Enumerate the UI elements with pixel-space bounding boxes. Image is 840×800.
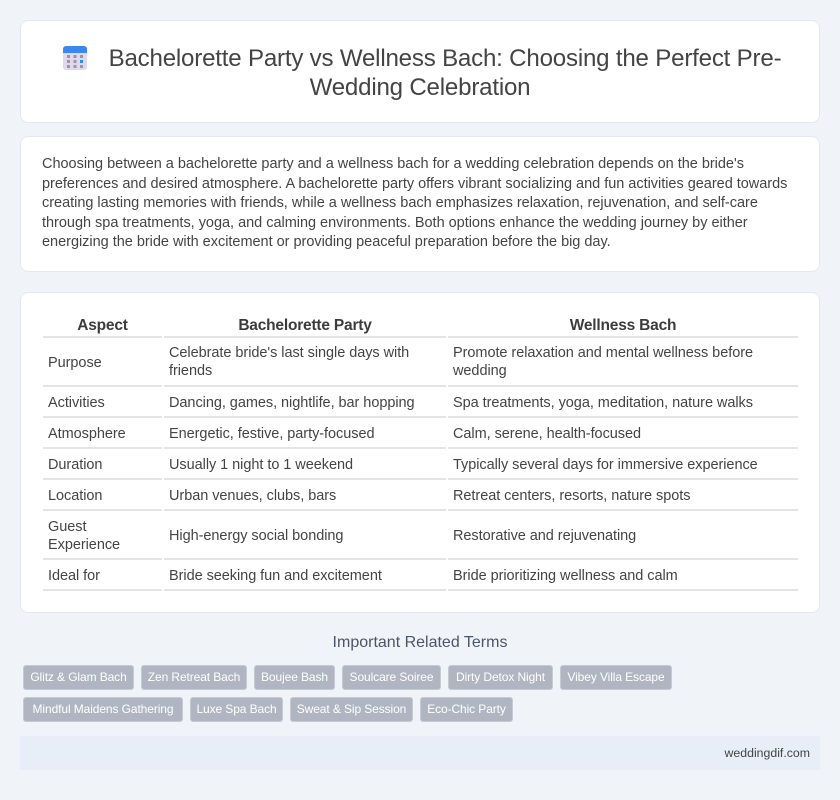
table rows: Urban venues, clubs, bars xyxy=(169,488,336,504)
table rows: wedding xyxy=(453,363,507,379)
table rows: friends xyxy=(169,363,212,379)
intro text: Choosing between a bachelorette party and a wellness bach for a wedding celebration depends on the bride's xyxy=(42,156,744,172)
table rows: Dancing, games, nightlife, bar hopping xyxy=(169,395,415,411)
table rows: Ideal for xyxy=(48,568,100,584)
table rows: Retreat centers, resorts, nature spots xyxy=(453,488,690,504)
tag list: Zen Retreat Bach xyxy=(148,670,240,684)
footer bar xyxy=(20,736,820,770)
title xyxy=(109,45,781,101)
table rows: Purpose xyxy=(48,355,102,371)
table rows: Duration xyxy=(48,457,102,473)
table rows: Promote relaxation and mental wellness before xyxy=(453,345,753,361)
intro text: energizing the bride with excitement or providing peaceful preparation before the big day. xyxy=(42,234,611,250)
table rows: Location xyxy=(48,488,102,504)
table rows: Bride prioritizing wellness and calm xyxy=(453,568,678,584)
icon: calendar xyxy=(63,46,87,70)
table rows: Experience xyxy=(48,537,120,553)
tag list: Glitz & Glam Bach xyxy=(30,670,127,684)
table header: Aspect xyxy=(77,317,128,334)
intro text: preferences and desired atmosphere. A bachelorette party offers vibrant socializing and fun activities geared towards xyxy=(42,176,787,192)
tag list: Sweat & Sip Session xyxy=(297,702,406,716)
panel: title card xyxy=(20,20,820,123)
title: Bachelorette Party vs Wellness Bach: Choosing the Perfect Pre- xyxy=(109,45,781,72)
tag list: Eco-Chic Party xyxy=(427,702,506,716)
tag list xyxy=(23,665,672,722)
heading: related terms: Important Related Terms xyxy=(333,634,507,651)
table rows: Activities xyxy=(48,395,105,411)
title: Wedding Celebration xyxy=(310,74,530,101)
tag list: Mindful Maidens Gathering xyxy=(33,702,173,716)
table rows: Celebrate bride's last single days with xyxy=(169,345,409,361)
intro text: through spa treatments, yoga, and calming environments. Both options enhance the wedding journey by either xyxy=(42,215,748,231)
intro text xyxy=(42,156,787,250)
tag list: Soulcare Soiree xyxy=(350,670,433,684)
panel: comparison table xyxy=(20,292,820,613)
table rows: Usually 1 night to 1 weekend xyxy=(169,457,353,473)
table header: Bachelorette Party xyxy=(238,317,372,334)
tag list: Vibey Villa Escape xyxy=(567,670,665,684)
table rows: High-energy social bonding xyxy=(169,528,343,544)
table rows: Guest xyxy=(48,519,86,535)
table rows: Typically several days for immersive experience xyxy=(453,457,758,473)
tag list: Boujee Bash xyxy=(261,670,328,684)
tag list: Dirty Detox Night xyxy=(456,670,545,684)
table header xyxy=(77,317,676,334)
table header: Wellness Bach xyxy=(570,317,676,334)
table rows xyxy=(43,336,798,591)
table rows: Restorative and rejuvenating xyxy=(453,528,636,544)
table rows: Bride seeking fun and excitement xyxy=(169,568,382,584)
table rows: Calm, serene, health-focused xyxy=(453,426,641,442)
panel: introduction xyxy=(20,136,820,272)
intro text: creating lasting memories with friends, while a wellness bach emphasizes relaxation, rejuvenation, and self-care xyxy=(42,195,758,211)
tag list: Luxe Spa Bach xyxy=(196,702,277,716)
table rows: Spa treatments, yoga, meditation, nature walks xyxy=(453,395,753,411)
table rows: Atmosphere xyxy=(48,426,126,442)
table rows: Energetic, festive, party-focused xyxy=(169,426,374,442)
footer source: weddingdif.com xyxy=(725,746,810,760)
